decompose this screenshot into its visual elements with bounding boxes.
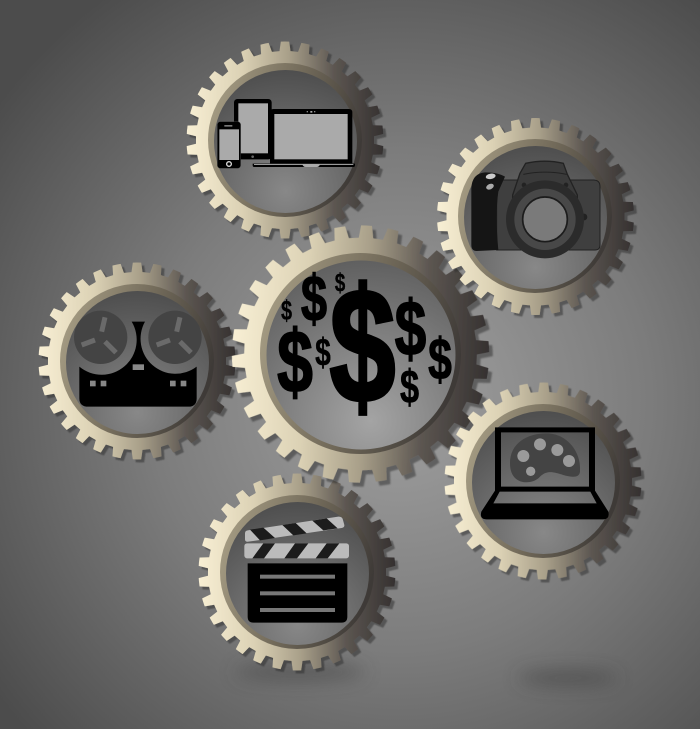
cog wheel: [186, 42, 384, 238]
cog wheel: [226, 219, 495, 489]
gear: devices: [186, 42, 384, 238]
icon: dollar signs: $: [329, 256, 396, 437]
gear: digital art: [444, 382, 642, 580]
bevel ring: [260, 253, 461, 454]
icon: reel to reel: [74, 311, 202, 407]
bevel ring: [458, 139, 612, 293]
cog wheel: [38, 262, 236, 460]
icon: dollar signs: $: [281, 296, 292, 327]
icon: dollar signs: $: [400, 361, 419, 413]
inner disc: [266, 260, 456, 450]
bevel ring: [208, 63, 362, 217]
icon: dollar signs: [277, 256, 452, 437]
gear: clapperboard: [198, 474, 396, 670]
inner disc: [472, 411, 615, 554]
icon: phone tablet laptop: [217, 99, 355, 168]
cog wheel: [437, 118, 634, 315]
icon: clapperboard: [244, 517, 349, 623]
gear: tape recorder: [38, 262, 236, 460]
ground shadow: left: [235, 663, 365, 681]
icon: laptop with palette: [481, 427, 609, 519]
icon: dollar signs: $: [301, 262, 327, 334]
icon: dollar signs: $: [395, 285, 426, 372]
bevel ring: [60, 284, 214, 438]
inner disc: [66, 291, 209, 434]
inner disc: [464, 146, 607, 289]
cog wheel: [444, 382, 642, 580]
inner disc: [214, 70, 357, 213]
inner disc: [226, 502, 369, 645]
icon: dollar signs: $: [335, 267, 346, 297]
icon: dollar signs: $: [315, 331, 331, 375]
icon: dollar signs: $: [428, 326, 452, 392]
ground shadow: right: [518, 671, 618, 685]
gear: camera: [437, 118, 634, 315]
icon: dollar signs: $: [277, 313, 313, 411]
cog wheel: [198, 474, 396, 670]
icon: camera: [471, 161, 600, 258]
bevel ring: [220, 495, 374, 649]
gear: money (centre): [226, 219, 495, 489]
bevel ring: [466, 404, 620, 558]
